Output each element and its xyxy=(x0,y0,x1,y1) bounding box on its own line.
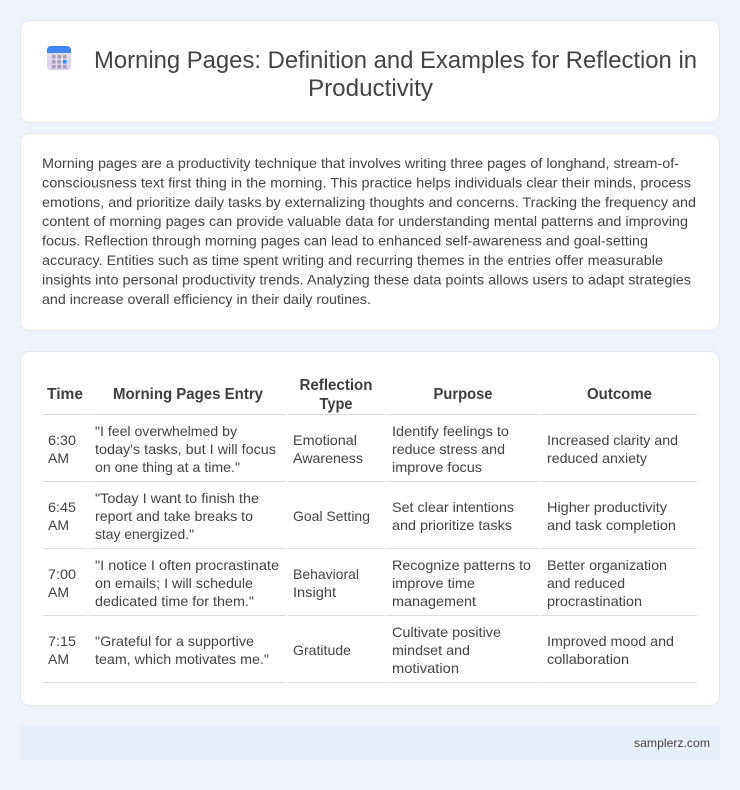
table row: 7:00 AM: and reduced xyxy=(547,575,625,591)
table row: 6:30 AM: Awareness xyxy=(293,450,363,466)
text block: description paragraph xyxy=(42,155,696,307)
table row: 6:30 AM: Emotional xyxy=(293,432,357,448)
table row: 6:45 AM: and prioritize tasks xyxy=(392,517,512,533)
panel: title card xyxy=(20,20,720,122)
table row: 6:30 AM: AM xyxy=(48,450,69,466)
table row: 7:00 AM: AM xyxy=(48,584,69,600)
table row: 7:00 AM: Better organization xyxy=(547,557,667,573)
table row: 6:45 AM: "Today I want to finish the xyxy=(95,490,259,506)
table row: 6:30 AM: Identify feelings to xyxy=(392,423,509,439)
text block: description paragraph: consciousness text first thing in the morning. This practice helps individuals clear their minds, process xyxy=(42,174,691,190)
table row: 6:30 AM: improve focus xyxy=(392,459,482,475)
footer: samplerz.com xyxy=(634,736,710,750)
table header: Reflection xyxy=(300,377,372,394)
footer xyxy=(20,726,720,760)
table row: 6:30 AM xyxy=(48,423,678,475)
table row: 7:15 AM: AM xyxy=(48,651,69,667)
table row: 7:15 AM: collaboration xyxy=(547,651,629,667)
table row: 7:00 AM: procrastination xyxy=(547,593,642,609)
table row: 6:30 AM: Increased clarity and xyxy=(547,432,678,448)
table row: 7:00 AM: management xyxy=(392,593,476,609)
table row: 7:15 AM: Gratitude xyxy=(293,642,351,658)
table row: 6:30 AM: reduce stress and xyxy=(392,441,505,457)
table row: 6:45 AM: and task completion xyxy=(547,517,676,533)
table row: 6:45 AM: Higher productivity xyxy=(547,499,667,515)
table header: Time xyxy=(47,386,83,403)
table header: Morning Pages Entry xyxy=(113,386,263,403)
table row: 6:30 AM: 6:30 xyxy=(48,432,76,448)
table row: 7:15 AM: Improved mood and xyxy=(547,633,674,649)
text block: description paragraph: Morning pages are a productivity technique that involves writing three pages of longhand, stream-of- xyxy=(42,155,679,171)
table row: 6:45 AM: Goal Setting xyxy=(293,508,370,524)
table row: 7:15 AM: mindset and xyxy=(392,642,470,658)
table header: Type xyxy=(320,396,353,413)
table header: Purpose xyxy=(434,386,493,403)
table row: 6:45 AM: AM xyxy=(48,517,69,533)
text block: description paragraph: accuracy. Entities such as time spent writing and recurring themes in the entries offer measurable xyxy=(42,252,663,268)
panel: description xyxy=(20,134,720,330)
title: Morning Pages: Definition and Examples for Reflection in xyxy=(94,47,697,74)
table row: 6:30 AM: on one thing at a time." xyxy=(95,459,240,475)
text block: description paragraph: emotions, and prioritize daily tasks by externalizing thoughts and concerns. Tracking the frequency and xyxy=(42,194,696,210)
text block: description paragraph: content of morning pages can provide valuable data for understanding mental patterns and improving xyxy=(42,213,688,229)
table row: 7:15 AM: 7:15 xyxy=(48,633,76,649)
table row: 7:00 AM: on emails; I will schedule xyxy=(95,575,253,591)
title: Productivity xyxy=(308,75,433,102)
table row: 7:00 AM xyxy=(48,557,667,609)
table row: 7:15 AM: Cultivate positive xyxy=(392,624,501,640)
text block: description paragraph: focus. Reflection through morning pages can lead to enhanced self-awareness and goal-setting xyxy=(42,233,648,249)
table row: 7:15 AM xyxy=(48,624,674,676)
table row: 6:45 AM xyxy=(48,490,676,542)
table row: 6:30 AM: reduced anxiety xyxy=(547,450,647,466)
table row: 7:00 AM: improve time xyxy=(392,575,475,591)
panel: table card xyxy=(20,352,720,706)
table row: 6:30 AM: today's tasks, but I will focus xyxy=(95,441,276,457)
table row: 6:45 AM: stay energized." xyxy=(95,526,194,542)
table row: 6:30 AM: "I feel overwhelmed by xyxy=(95,423,237,439)
table row: 7:00 AM: Behavioral xyxy=(293,566,359,582)
text block: description paragraph: insights into personal productivity trends. Analyzing these data points allows users to adapt strategies xyxy=(42,271,691,287)
table row: 7:00 AM: dedicated time for them." xyxy=(95,593,254,609)
table row: 7:15 AM: "Grateful for a supportive xyxy=(95,633,254,649)
table row: 7:00 AM: Insight xyxy=(293,584,336,600)
table row: 6:45 AM: 6:45 xyxy=(48,499,76,515)
table row: 6:45 AM: Set clear intentions xyxy=(392,499,514,515)
text block: description paragraph: and increase overall efficiency in their daily routines. xyxy=(42,291,371,307)
table row: 7:15 AM: motivation xyxy=(392,660,459,676)
table row: 6:45 AM: report and take breaks to xyxy=(95,508,253,524)
table header: Outcome xyxy=(587,386,652,403)
table row: 7:00 AM: 7:00 xyxy=(48,566,76,582)
table row: 7:00 AM: "I notice I often procrastinate xyxy=(95,557,279,573)
title xyxy=(94,47,697,102)
table row: 7:00 AM: Recognize patterns to xyxy=(392,557,531,573)
table header xyxy=(47,377,652,413)
table row: 7:15 AM: team, which motivates me." xyxy=(95,651,269,667)
icon: calendar xyxy=(47,46,71,70)
